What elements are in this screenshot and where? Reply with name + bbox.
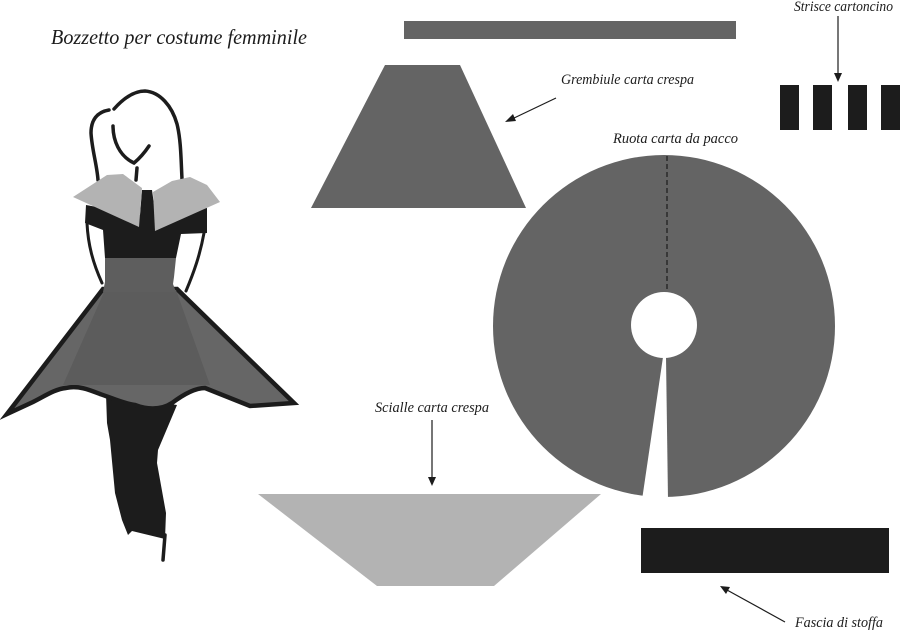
label: wheel: Ruota carta da pacco [612,131,738,147]
arrow: apron [505,98,556,122]
label: shawl: Scialle carta crespa [375,400,489,416]
arms [87,223,204,291]
arrow: fabric band [720,586,785,622]
fabric band [641,528,889,573]
label: fabric band: Fascia di stoffa [794,615,883,631]
apron on skirt [63,290,210,385]
card strips [780,85,900,130]
hair and face [91,91,182,180]
legs [106,394,177,560]
bodice [85,190,207,258]
apron pattern [311,65,526,208]
label: apron: Grembiule carta crespa [561,72,694,88]
waist band [103,258,176,292]
arrow: shawl [428,420,436,486]
arrow: card strips [834,16,842,82]
shawl pattern [258,494,601,586]
figure: costume sketch [7,91,294,560]
top strip [404,21,736,39]
wheel pattern [493,155,835,500]
title: Bozzetto per costume femminile [51,25,307,49]
skirt [7,289,294,414]
shawl collar [73,174,220,231]
